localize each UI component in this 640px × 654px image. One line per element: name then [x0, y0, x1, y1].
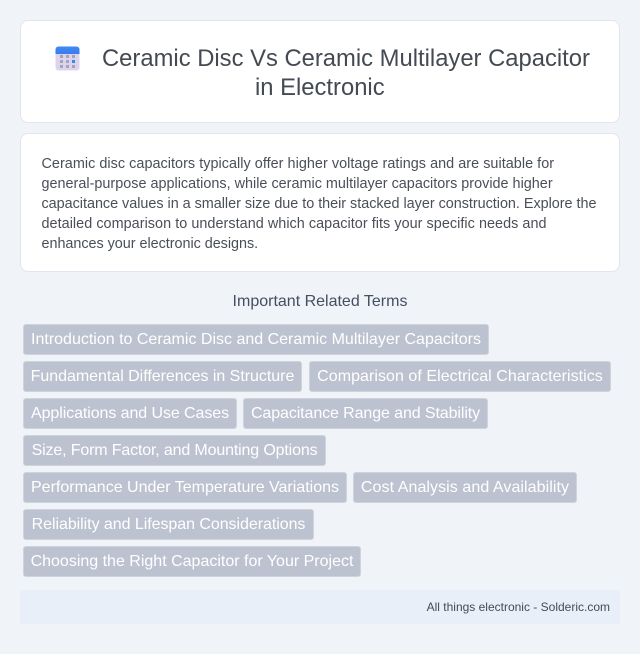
intro paragraph: capacitance values in a smaller size due to their stacked layer construction. Explore the	[42, 196, 596, 212]
tag list	[23, 324, 611, 577]
header card	[20, 20, 620, 123]
intro text card	[20, 133, 620, 272]
footer credit: All things electronic - Solderic.com	[427, 600, 610, 614]
tag: Size, Form Factor, and Mounting Options	[32, 442, 317, 459]
tag: Applications and Use Cases	[31, 405, 229, 422]
tag: Fundamental Differences in Structure	[31, 368, 294, 385]
tag	[23, 435, 326, 466]
footer bar	[20, 590, 620, 624]
intro paragraph: detailed comparison to understand which capacitor fits your specific needs and	[42, 216, 547, 232]
heading: important related terms: Important Related Terms	[233, 293, 407, 310]
intro paragraph	[42, 156, 596, 252]
tag	[23, 509, 314, 540]
tag	[23, 546, 361, 577]
title	[102, 45, 590, 101]
tag	[243, 398, 488, 429]
tag: Capacitance Range and Stability	[251, 405, 480, 422]
tag: Comparison of Electrical Characteristics	[317, 368, 603, 385]
tag	[23, 398, 237, 429]
tag: Performance Under Temperature Variations	[31, 479, 339, 496]
title: Ceramic Disc Vs Ceramic Multilayer Capacitor	[102, 45, 590, 72]
tag: Introduction to Ceramic Disc and Ceramic Multilayer Capacitors	[31, 331, 481, 348]
intro paragraph: Ceramic disc capacitors typically offer higher voltage ratings and are suitable for	[42, 156, 554, 172]
tag	[309, 361, 611, 392]
tag: Reliability and Lifespan Considerations	[32, 516, 305, 533]
tag	[23, 324, 489, 355]
tag	[353, 472, 577, 503]
icon: calendar grid	[56, 46, 80, 70]
tag	[23, 361, 302, 392]
intro paragraph: general-purpose applications, while ceramic multilayer capacitors provide higher	[42, 176, 553, 192]
tag	[23, 472, 347, 503]
intro paragraph: enhances your electronic designs.	[42, 236, 258, 252]
title: in Electronic	[255, 74, 385, 101]
tag: Cost Analysis and Availability	[361, 479, 569, 496]
tag: Choosing the Right Capacitor for Your Project	[31, 553, 353, 570]
